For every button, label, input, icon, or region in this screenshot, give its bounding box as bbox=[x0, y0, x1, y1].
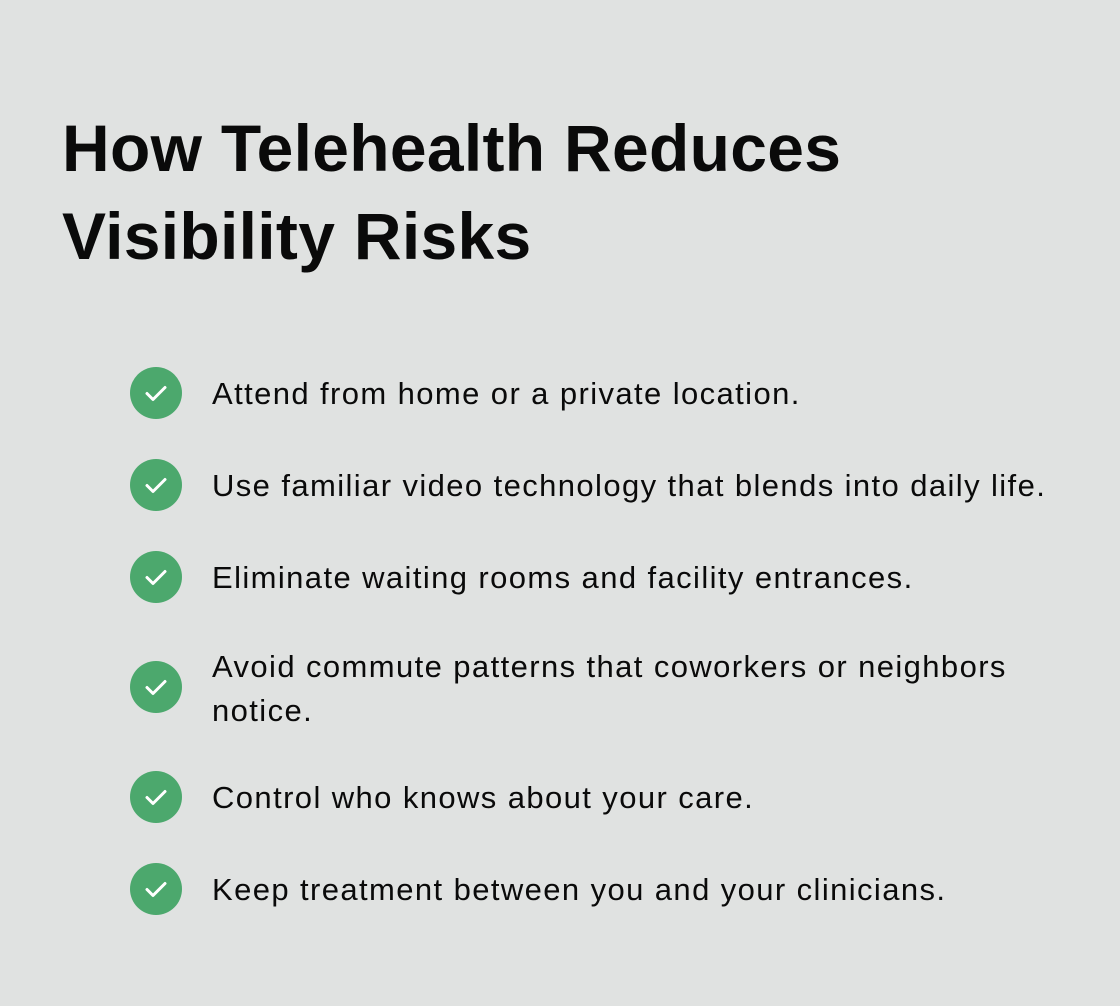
text: Attend from home or a private location. bbox=[212, 376, 801, 411]
icon: check bbox=[130, 367, 182, 419]
icon: check bbox=[130, 771, 182, 823]
icon: check bbox=[130, 863, 182, 915]
text: notice. bbox=[212, 693, 313, 728]
item 6 bbox=[130, 863, 946, 915]
text: Keep treatment between you and your clinicians. bbox=[212, 872, 946, 907]
text: Avoid commute patterns that coworkers or neighbors bbox=[212, 649, 1007, 684]
text: Use familiar video technology that blends into daily life. bbox=[212, 468, 1046, 503]
title: Visibility Risks bbox=[62, 199, 531, 273]
text: Eliminate waiting rooms and facility entrances. bbox=[212, 560, 914, 595]
item 1 bbox=[130, 367, 801, 419]
title: How Telehealth Reduces bbox=[62, 111, 841, 185]
text bbox=[212, 649, 1007, 728]
icon: check bbox=[130, 661, 182, 713]
item 4 bbox=[130, 649, 1007, 728]
item 5 bbox=[130, 771, 754, 823]
text: Control who knows about your care. bbox=[212, 780, 754, 815]
icon: check bbox=[130, 459, 182, 511]
item 2 bbox=[130, 459, 1046, 511]
item 3 bbox=[130, 551, 914, 603]
icon: check bbox=[130, 551, 182, 603]
title bbox=[62, 111, 841, 273]
